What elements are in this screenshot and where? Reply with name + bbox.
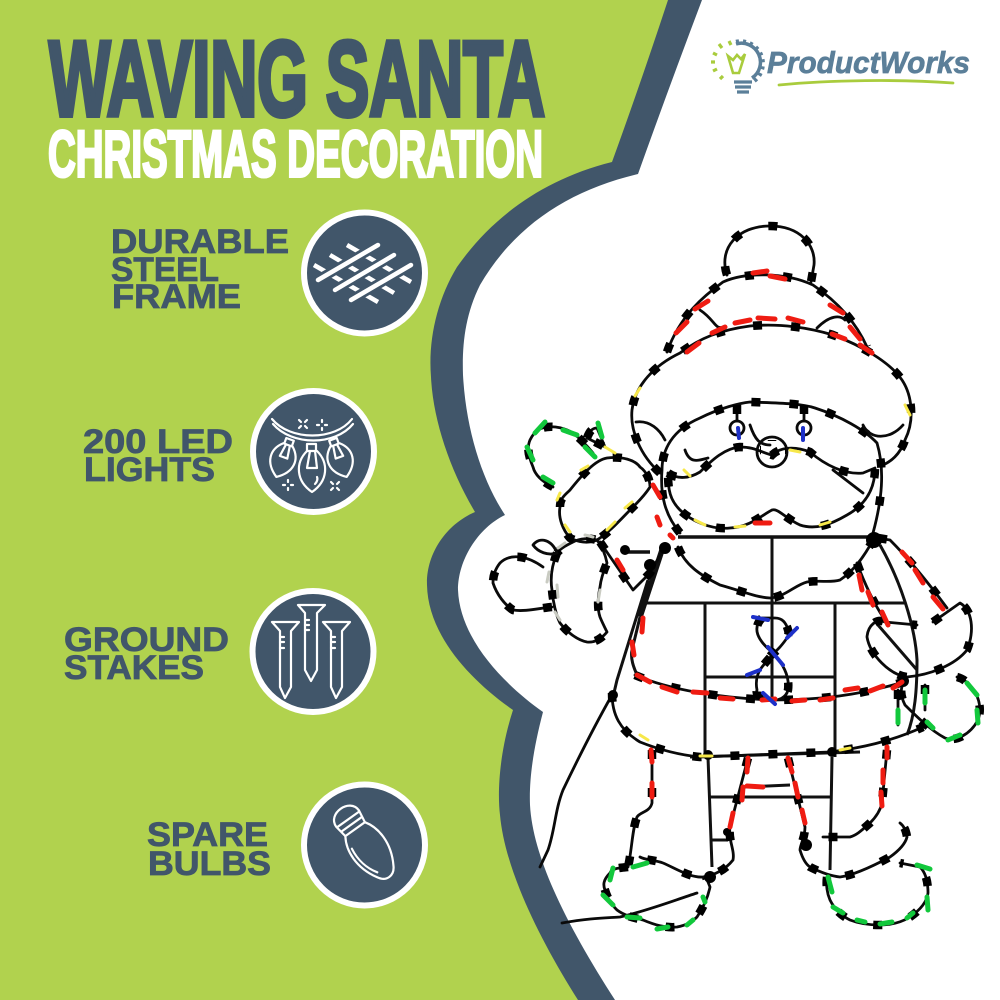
title: CHRISTMAS DECORATION — [48, 116, 543, 190]
feature: ground stakes label: GROUND — [64, 621, 229, 659]
icon: spare bulb — [304, 784, 425, 906]
light clips — [493, 226, 980, 927]
feature: 200 LED lights label: 200 LED — [83, 423, 233, 461]
icon: string of lights — [253, 391, 374, 512]
blue lights — [738, 428, 803, 704]
illustration: Santa light frame — [493, 226, 980, 929]
light wires — [493, 226, 980, 927]
feature: spare bulbs label — [147, 816, 271, 883]
title: WAVING SANTA — [49, 18, 545, 138]
feature: durable steel frame label: FRAME — [112, 278, 241, 316]
feature: durable steel frame label: DURABLE — [111, 223, 289, 261]
icon: ground stakes — [252, 591, 374, 712]
background: green panel — [0, 0, 668, 1000]
green lights — [527, 422, 978, 929]
warm white lights — [557, 388, 910, 756]
frame junction clips — [608, 532, 909, 883]
power cord — [540, 695, 697, 923]
unlit grey bulbs — [547, 535, 600, 620]
logo: ProductWorks — [711, 41, 970, 92]
logo underline — [779, 81, 953, 85]
logo icon: gear bulb — [711, 41, 763, 92]
feature: spare bulbs label: SPARE — [147, 816, 268, 854]
feature: durable steel frame label — [111, 223, 289, 316]
feature: 200 LED lights label — [83, 423, 233, 489]
logo wordmark: ProductWorks — [767, 45, 970, 80]
red lights — [617, 271, 943, 827]
nose and eyes — [533, 310, 903, 554]
background: right white area with dark band — [0, 0, 702, 1000]
icon: steel mesh — [304, 212, 425, 334]
feature: ground stakes label: STAKES — [64, 649, 204, 687]
title — [48, 18, 545, 190]
steel frame grid — [613, 537, 917, 870]
feature: 200 LED lights label: LIGHTS — [84, 451, 215, 489]
feature: spare bulbs label: BULBS — [148, 845, 271, 883]
feature: durable steel frame label: STEEL — [111, 251, 219, 289]
feature: ground stakes label — [64, 621, 229, 687]
